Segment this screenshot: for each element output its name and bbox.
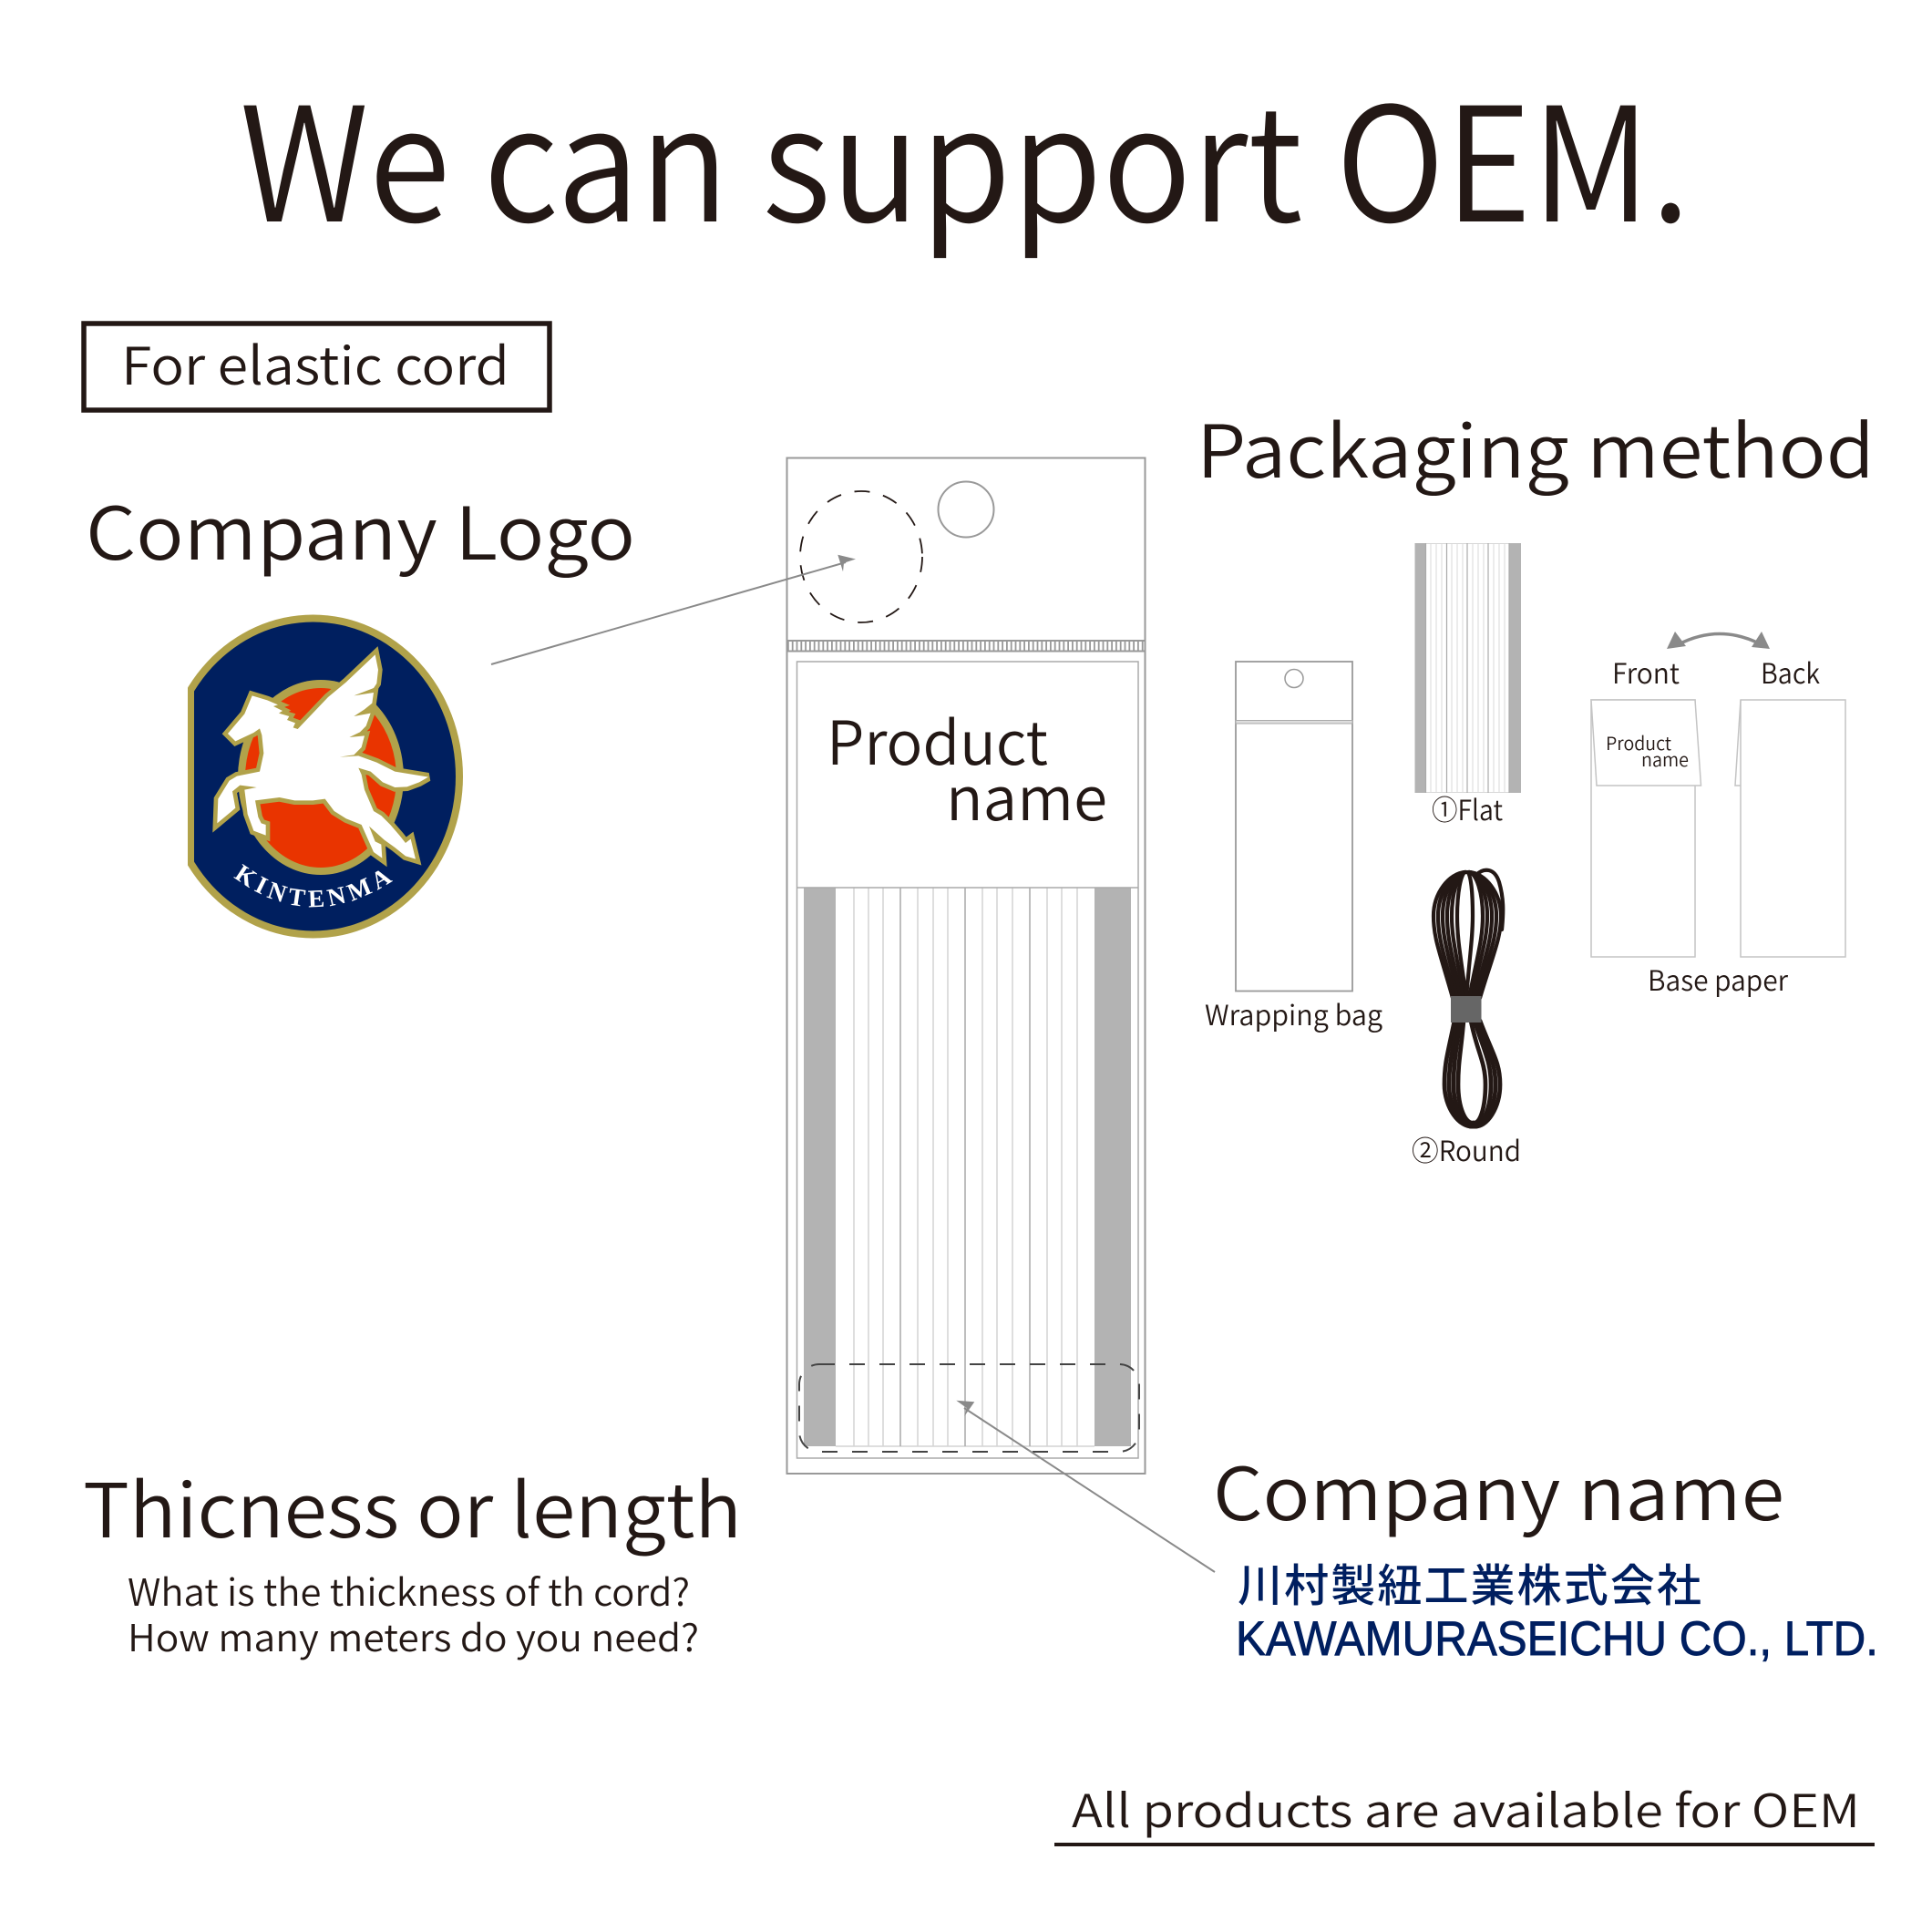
company name sample: 川村製紐工業株式会社 xyxy=(1238,1550,1701,1615)
product name label: name xyxy=(946,751,1107,838)
badge: for elastic cord xyxy=(84,324,550,410)
base paper option: Front xyxy=(1612,651,1680,692)
product name label xyxy=(827,695,1107,838)
base paper option: Base paper xyxy=(1648,958,1788,999)
leader arrow: company name to bag xyxy=(956,1401,1215,1572)
logo placement dashed circle xyxy=(800,491,922,622)
badge: for elastic cord: For elastic cord xyxy=(121,325,509,400)
heading: company name: Company name xyxy=(1213,1436,1784,1542)
wrapping bag outline xyxy=(787,457,1145,1474)
company name sample xyxy=(1236,1550,1878,1666)
flat cord card xyxy=(796,662,1138,1458)
round cord option: ②Round xyxy=(1412,1128,1521,1169)
back paper xyxy=(1735,700,1845,957)
round cord option xyxy=(1412,870,1521,1169)
company name dashed area xyxy=(799,1364,1139,1452)
product illustration: packaged elastic cord xyxy=(787,457,1146,1474)
seal band xyxy=(787,641,1146,651)
heading: company logo: Company Logo xyxy=(86,476,635,581)
title: We can support OEM. xyxy=(240,38,1690,268)
flat cord option: ①Flat xyxy=(1432,787,1503,828)
wrapping bag option xyxy=(1205,662,1382,1033)
question text xyxy=(128,1562,699,1662)
heading: thickness or length: Thicness or length xyxy=(83,1451,742,1559)
footer note: All products are available for OEM xyxy=(1072,1775,1860,1841)
logo: Kintenma pegasus emblem xyxy=(188,614,463,939)
question text: How many meters do you need? xyxy=(128,1608,699,1662)
heading: packaging method: Packaging method xyxy=(1197,394,1875,499)
question text: What is the thickness of th cord? xyxy=(128,1562,690,1617)
leader arrow: logo to bag xyxy=(491,555,856,664)
base paper option xyxy=(1591,632,1845,999)
flip arrow xyxy=(1667,632,1770,649)
product name label: Product xyxy=(827,695,1048,783)
logo: Kintenma pegasus emblem: KINTENMA xyxy=(233,864,393,908)
front paper: Product xyxy=(1606,729,1672,755)
company name sample: KAWAMURASEICHU CO., LTD. xyxy=(1236,1612,1878,1666)
base paper option: Back xyxy=(1761,651,1820,692)
wrapping bag option: Wrapping bag xyxy=(1205,992,1382,1033)
hanging hole xyxy=(939,481,993,538)
front paper: name xyxy=(1641,745,1689,772)
front paper xyxy=(1591,700,1701,957)
flat cord option xyxy=(1414,543,1521,828)
